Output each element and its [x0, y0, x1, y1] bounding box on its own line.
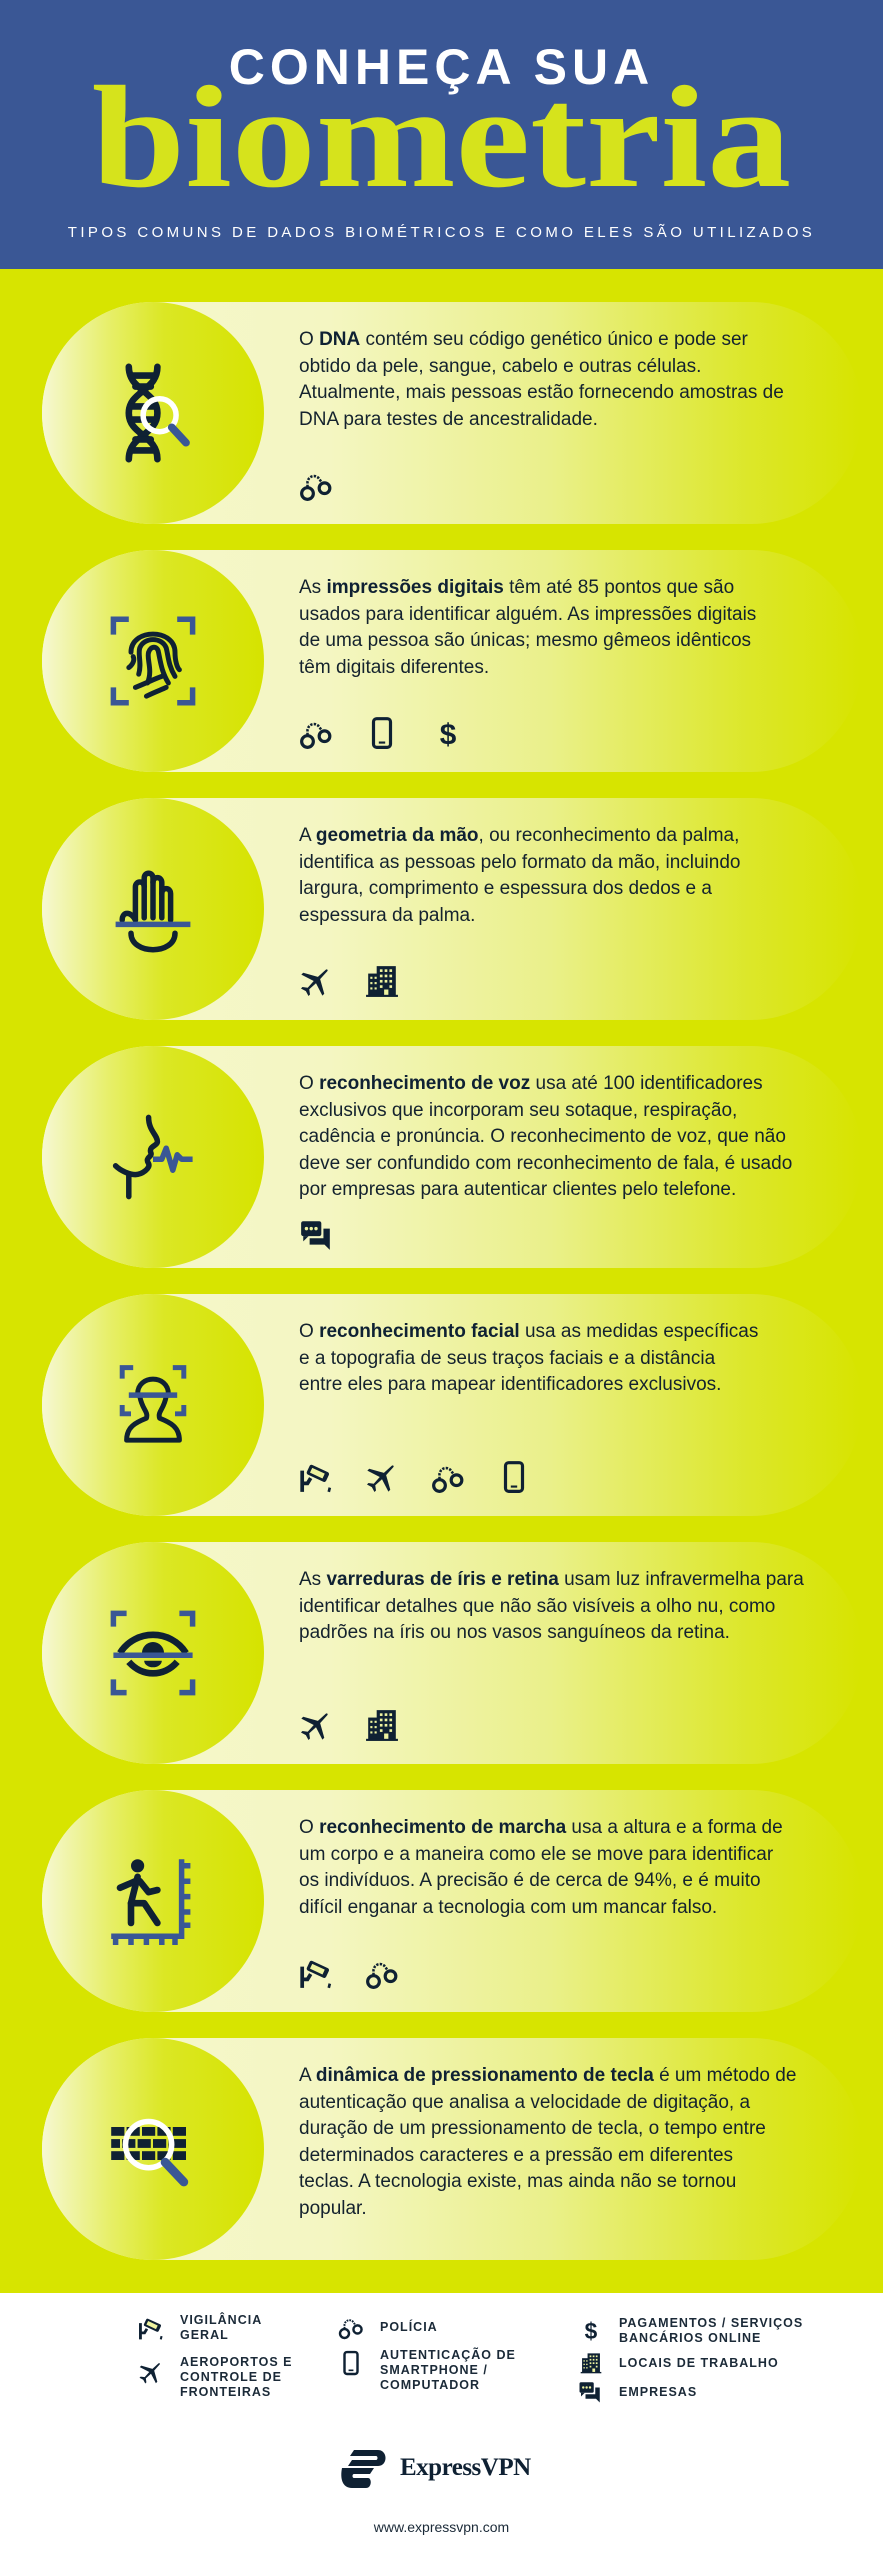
legend: smartphone — [343, 2347, 516, 2392]
usage icons — [301, 966, 398, 997]
legend: polícia: POLÍCIA — [380, 2320, 438, 2334]
text: iris: As varreduras de íris e retina usam luz infravermelha para — [299, 1569, 804, 1590]
usage icons — [300, 474, 332, 501]
legend: aeroportos: CONTROLE DE — [180, 2370, 282, 2384]
text: hand geometry: largura, comprimento e espessura dos dedos e a — [299, 878, 712, 899]
legend: smartphone: SMARTPHONE / — [380, 2363, 488, 2377]
text: keystroke: determinados caracteres e a pressão em diferentes — [299, 2145, 733, 2166]
panel: DNA — [42, 302, 840, 524]
usage icons — [300, 717, 456, 749]
panel: hand geometry — [42, 798, 840, 1020]
text: voice: deve ser confundido com reconhecimento de fala, é usado — [299, 1153, 792, 1174]
legend: aeroportos: AEROPORTOS E — [180, 2355, 292, 2369]
legend: smartphone: AUTENTICAÇÃO DE — [380, 2348, 516, 2362]
text: fingerprints — [299, 577, 756, 678]
text: voice: exclusivos que incorporam seu sotaque, respiração, — [299, 1100, 737, 1121]
legend: empresas — [580, 2382, 697, 2402]
text: hand geometry: A geometria da mão, ou reconhecimento da palma, — [299, 825, 739, 846]
logo: ExpressVPN: ExpressVPN — [400, 2454, 531, 2481]
text: keystroke: duração de um pressionamento de tecla, o tempo entre — [299, 2118, 766, 2139]
text: DNA: O DNA contém seu código genético único e pode ser — [299, 329, 748, 350]
text: DNA: DNA para testes de ancestralidade. — [299, 409, 598, 430]
text: fingerprints: usados para identificar alguém. As impressões digitais — [299, 604, 756, 625]
panel: iris — [42, 1542, 840, 1764]
text: gait — [299, 1817, 783, 1918]
icon: voice profile — [112, 1114, 193, 1200]
legend: smartphone: COMPUTADOR — [380, 2378, 480, 2392]
text: voice: cadência e pronúncia. O reconhecimento de voz, que não — [299, 1126, 786, 1147]
panel: keystroke — [42, 2038, 840, 2260]
text: fingerprints: têm digitais diferentes. — [299, 657, 489, 678]
text: keystroke: popular. — [299, 2198, 367, 2219]
text: iris — [299, 1569, 804, 1643]
text: facial — [299, 1321, 758, 1395]
legend: empresas: EMPRESAS — [619, 2385, 697, 2399]
title: CONHEÇA SUA: CONHEÇA SUA — [229, 39, 654, 95]
legend: locais de trabalho: LOCAIS DE TRABALHO — [619, 2356, 779, 2370]
legend: aeroportos — [140, 2355, 292, 2399]
text: hand geometry — [299, 825, 740, 926]
footer url: www.expressvpn.com — [374, 2519, 509, 2535]
text: keystroke: teclas. A tecnologia existe, mas ainda não se tornou — [299, 2171, 736, 2192]
usage icons — [301, 1221, 330, 1250]
text: hand geometry: espessura da palma. — [299, 905, 475, 926]
text: gait: um corpo e a maneira como ele se move para identificar — [299, 1844, 773, 1865]
header — [0, 0, 883, 269]
text: keystroke: autenticação que analisa a velocidade de digitação, a — [299, 2092, 750, 2113]
icon: keyboard with magnifier — [111, 2118, 188, 2186]
usage icons — [300, 1461, 524, 1493]
icon: face — [120, 1365, 186, 1443]
text: voice: por empresas para autenticar clientes pelo telefone. — [299, 1179, 736, 1200]
text: DNA: Atualmente, mais pessoas estão fornecendo amostras de — [299, 382, 784, 403]
text: facial: O reconhecimento facial usa as medidas específicas — [299, 1321, 758, 1342]
icon: hand — [116, 870, 190, 952]
legend — [139, 2312, 803, 2402]
text: gait: os indivíduos. A precisão é de cerca de 94%, e é muito — [299, 1870, 761, 1891]
legend: vigilância: GERAL — [180, 2328, 229, 2342]
panel: voice — [42, 1046, 840, 1268]
usage icons — [300, 1960, 398, 1989]
text: DNA — [299, 329, 784, 430]
text: hand geometry: identifica as pessoas pelo formato da mão, incluindo — [299, 852, 740, 873]
legend: aeroportos: FRONTEIRAS — [180, 2385, 271, 2399]
text: gait: O reconhecimento de marcha usa a altura e a forma de — [299, 1817, 783, 1838]
text: fingerprints: As impressões digitais têm até 85 pontos que são — [299, 577, 734, 598]
legend: locais de trabalho — [580, 2353, 779, 2374]
text: voice: O reconhecimento de voz usa até 100 identificadores — [299, 1073, 763, 1094]
text: facial: e a topografia de seus traços faciais e a distância — [299, 1348, 715, 1369]
legend: pagamentos: BANCÁRIOS ONLINE — [619, 2331, 761, 2345]
icon: DNA with magnifier — [126, 364, 190, 462]
icon: eye — [110, 1610, 196, 1696]
icon: fingerprint — [110, 616, 196, 706]
legend: pagamentos — [585, 2316, 803, 2345]
text: iris: identificar detalhes que não são visíveis a olho nu, como — [299, 1596, 775, 1617]
icon: walking figure with ruler — [111, 1859, 190, 1945]
subtitle: TIPOS COMUNS DE DADOS BIOMÉTRICOS E COMO ELES SÃO UTILIZADOS — [68, 224, 815, 241]
usage icons — [301, 1710, 398, 1741]
panel: facial — [42, 1294, 840, 1516]
panel: fingerprints — [42, 550, 840, 772]
text: keystroke — [299, 2065, 796, 2219]
text: facial: entre eles para mapear identificadores exclusivos. — [299, 1374, 721, 1395]
legend: pagamentos: PAGAMENTOS / SERVIÇOS — [619, 2316, 803, 2330]
logo: ExpressVPN — [341, 2450, 531, 2488]
legend: polícia — [338, 2319, 438, 2340]
legend: vigilância: VIGILÂNCIA — [180, 2313, 262, 2327]
text: keystroke: A dinâmica de pressionamento de tecla é um método de — [299, 2065, 796, 2086]
text: iris: padrões na íris ou nos vasos sanguíneos da retina. — [299, 1622, 730, 1643]
title: biometria: biometria — [92, 56, 791, 218]
legend: vigilância — [139, 2312, 262, 2342]
text: voice — [299, 1073, 792, 1200]
text: gait: difícil enganar a tecnologia com um mancar falso. — [299, 1897, 717, 1918]
text: DNA: obtido da pele, sangue, cabelo e outras células. — [299, 356, 701, 377]
panel: gait — [42, 1790, 840, 2012]
lime background — [0, 269, 883, 2293]
text: fingerprints: de uma pessoa são únicas; mesmo gêmeos idênticos — [299, 630, 751, 651]
